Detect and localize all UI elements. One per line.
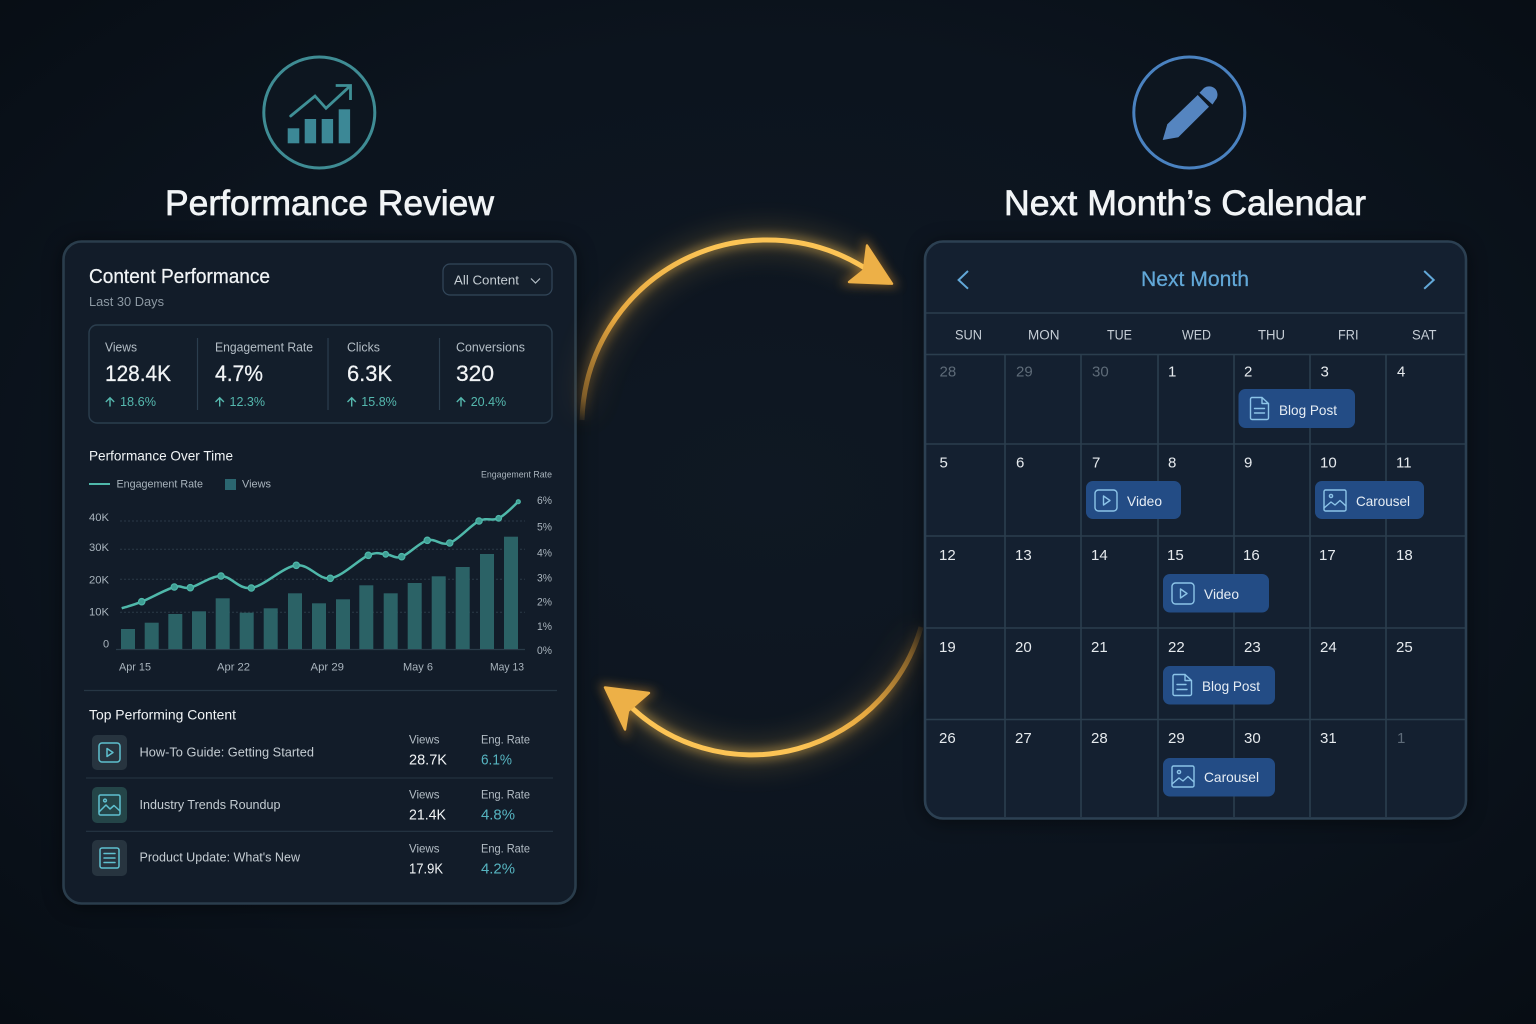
date numbers: 8: [1168, 454, 1176, 471]
date axis labels: [119, 661, 524, 673]
heading: Performance Review: Performance Review: [165, 184, 495, 223]
dropdown: all content: All Content: [454, 273, 519, 288]
date numbers: 20: [1015, 639, 1032, 656]
section heading: top performing content: Top Performing Content: [89, 706, 236, 722]
date numbers: 23: [1244, 639, 1261, 656]
date numbers: 4: [1397, 364, 1405, 381]
row: industry trends: Views: [409, 788, 440, 802]
left axis labels: 0: [103, 638, 109, 650]
row: industry trends: Industry Trends Roundup: [140, 797, 280, 812]
KPI: clicks: [347, 340, 397, 409]
KPI: views: 18.6%: [120, 394, 156, 409]
KPI: conversions: 320: [456, 361, 494, 386]
right axis labels: 3%: [537, 573, 552, 585]
right axis title: Engagement Rate: [481, 470, 552, 480]
arrow: performance to calendar: [582, 240, 893, 420]
weekday labels: TUE: [1107, 327, 1132, 342]
KPI: views: Views: [105, 340, 137, 354]
left axis labels: 40K: [89, 512, 110, 524]
date numbers: 18: [1396, 547, 1413, 564]
date numbers: 6: [1016, 454, 1024, 471]
date numbers: 15: [1167, 547, 1184, 564]
row: product update: [92, 840, 530, 877]
event: video, 7th: Video: [1127, 493, 1162, 509]
row: how-to guide: Eng. Rate: [481, 732, 530, 746]
date numbers: 3: [1320, 364, 1329, 381]
KPI: views: [105, 340, 171, 409]
row: how-to guide: 6.1%: [481, 752, 512, 769]
row: industry trends: 4.8%: [481, 807, 515, 824]
row: how-to guide: 28.7K: [409, 752, 447, 769]
view bars: [121, 537, 518, 649]
date range label: Last 30 Days: [89, 294, 164, 309]
KPI: clicks: Clicks: [347, 340, 380, 354]
date numbers: 26: [939, 730, 956, 747]
date numbers: [939, 364, 1413, 747]
date numbers: 24: [1320, 639, 1337, 656]
event: carousel, 29th: Carousel: [1204, 769, 1259, 785]
left axis labels: 10K: [89, 606, 110, 618]
right axis labels: 1%: [537, 621, 552, 633]
event: video, 15th: [1163, 574, 1269, 612]
KPI: engagement rate: Engagement Rate: [215, 340, 313, 354]
engagement line: [122, 500, 520, 608]
date numbers: 16: [1243, 547, 1260, 564]
date numbers: 10: [1320, 454, 1337, 471]
date numbers: 25: [1396, 639, 1413, 656]
icon: pencil badge: [1134, 57, 1245, 168]
date numbers: 5: [940, 454, 948, 471]
KPI: clicks: 15.8%: [361, 394, 397, 409]
left axis labels: 20K: [89, 574, 110, 586]
chart legend: Engagement Rate: [116, 479, 203, 491]
date numbers: 12: [939, 547, 956, 564]
panel: next month calendar: [925, 242, 1466, 821]
date numbers: 1: [1397, 730, 1405, 747]
weekday labels: WED: [1182, 327, 1211, 342]
date numbers: 9: [1244, 454, 1252, 471]
row: how-to guide: [92, 732, 530, 770]
arrow: calendar back to performance: [604, 627, 921, 755]
KPI: views: 128.4K: [105, 361, 171, 386]
weekday labels: THU: [1258, 327, 1285, 342]
row: product update: Eng. Rate: [481, 842, 530, 856]
date numbers: 27: [1015, 730, 1032, 747]
right axis labels: 0%: [537, 645, 552, 657]
right axis labels: 5%: [537, 522, 552, 534]
icon: performance chart badge: [264, 57, 375, 168]
date numbers: 19: [939, 639, 956, 656]
date numbers: 29: [1016, 364, 1033, 381]
panel heading: Content Performance: [89, 266, 270, 288]
icon: document: [92, 840, 127, 876]
date axis labels: Apr 15: [119, 661, 151, 673]
KPI: engagement rate: 4.7%: [215, 361, 263, 386]
row: product update: Product Update: What's New: [140, 850, 301, 865]
icon: image: [92, 787, 127, 823]
combo chart: views bars and engagement line: [89, 495, 552, 673]
KPI: conversions: Conversions: [456, 340, 525, 354]
row: how-to guide: How-To Guide: Getting Started: [140, 745, 314, 760]
calendar header: [959, 268, 1434, 291]
row: product update: 4.2%: [481, 860, 515, 877]
date axis labels: May 6: [403, 661, 433, 673]
date numbers: 13: [1015, 547, 1032, 564]
KPI: engagement rate: 12.3%: [230, 394, 265, 409]
row: product update: 17.9K: [409, 860, 443, 877]
date numbers: 31: [1320, 730, 1337, 747]
date axis labels: Apr 29: [310, 661, 344, 673]
weekday labels: MON: [1028, 327, 1060, 342]
dropdown: all content: [443, 264, 552, 295]
right axis labels: 4%: [537, 547, 552, 559]
KPI: conversions: 20.4%: [471, 394, 507, 409]
left axis labels: [89, 512, 110, 650]
date numbers: 1: [1168, 364, 1176, 381]
date numbers: 11: [1396, 454, 1412, 471]
date numbers: 22: [1168, 639, 1185, 656]
weekday labels: SUN: [955, 327, 982, 342]
date numbers: 30: [1092, 364, 1109, 381]
icon: video: [92, 735, 127, 770]
row: how-to guide: Views: [409, 732, 440, 746]
row: industry trends: 21.4K: [409, 807, 446, 824]
event: carousel, 29th: [1163, 758, 1275, 796]
date numbers: 17: [1319, 547, 1336, 564]
event: video, 15th: Video: [1204, 586, 1239, 602]
row: industry trends: [92, 787, 530, 824]
chart legend: [89, 479, 271, 491]
event: carousel, 10th: [1315, 481, 1424, 519]
event: blog post, 22nd: [1163, 666, 1275, 704]
right axis labels: 2%: [537, 597, 552, 609]
panel: content performance dashboard: [63, 242, 576, 906]
KPI: engagement rate: [215, 340, 313, 409]
row: product update: Views: [409, 842, 440, 856]
date numbers: 29: [1168, 730, 1185, 747]
KPI: conversions: [456, 340, 525, 409]
chart heading: Performance Over Time: [89, 448, 233, 464]
KPI summary box: [89, 325, 552, 423]
weekday labels: FRI: [1338, 327, 1358, 342]
date numbers: 30: [1244, 730, 1261, 747]
weekday labels: SAT: [1412, 327, 1436, 342]
event: carousel, 10th: Carousel: [1356, 493, 1410, 509]
date numbers: 28: [1091, 730, 1108, 747]
event: blog post, 22nd: Blog Post: [1202, 678, 1260, 694]
KPI: clicks: 6.3K: [347, 361, 392, 386]
date numbers: 14: [1091, 547, 1108, 564]
date numbers: 2: [1244, 364, 1252, 381]
date axis labels: May 13: [490, 661, 524, 673]
date axis labels: Apr 22: [217, 661, 250, 673]
row: industry trends: Eng. Rate: [481, 788, 530, 802]
heading: Next Month's Calendar: Next Month’s Calendar: [1004, 184, 1366, 223]
event: blog post, 2nd: [1238, 389, 1355, 428]
event: video, 7th: [1086, 481, 1181, 519]
calendar header: Next Month: [1141, 268, 1249, 291]
date numbers: 7: [1092, 454, 1100, 471]
right axis labels: 6%: [537, 495, 552, 507]
date numbers: 21: [1091, 639, 1108, 656]
left axis labels: 30K: [89, 542, 110, 554]
chart legend: Views: [242, 479, 271, 491]
right axis labels: [537, 495, 552, 657]
event: blog post, 2nd: Blog Post: [1279, 402, 1337, 418]
date numbers: 28: [940, 364, 956, 381]
weekday labels: [955, 327, 1436, 342]
